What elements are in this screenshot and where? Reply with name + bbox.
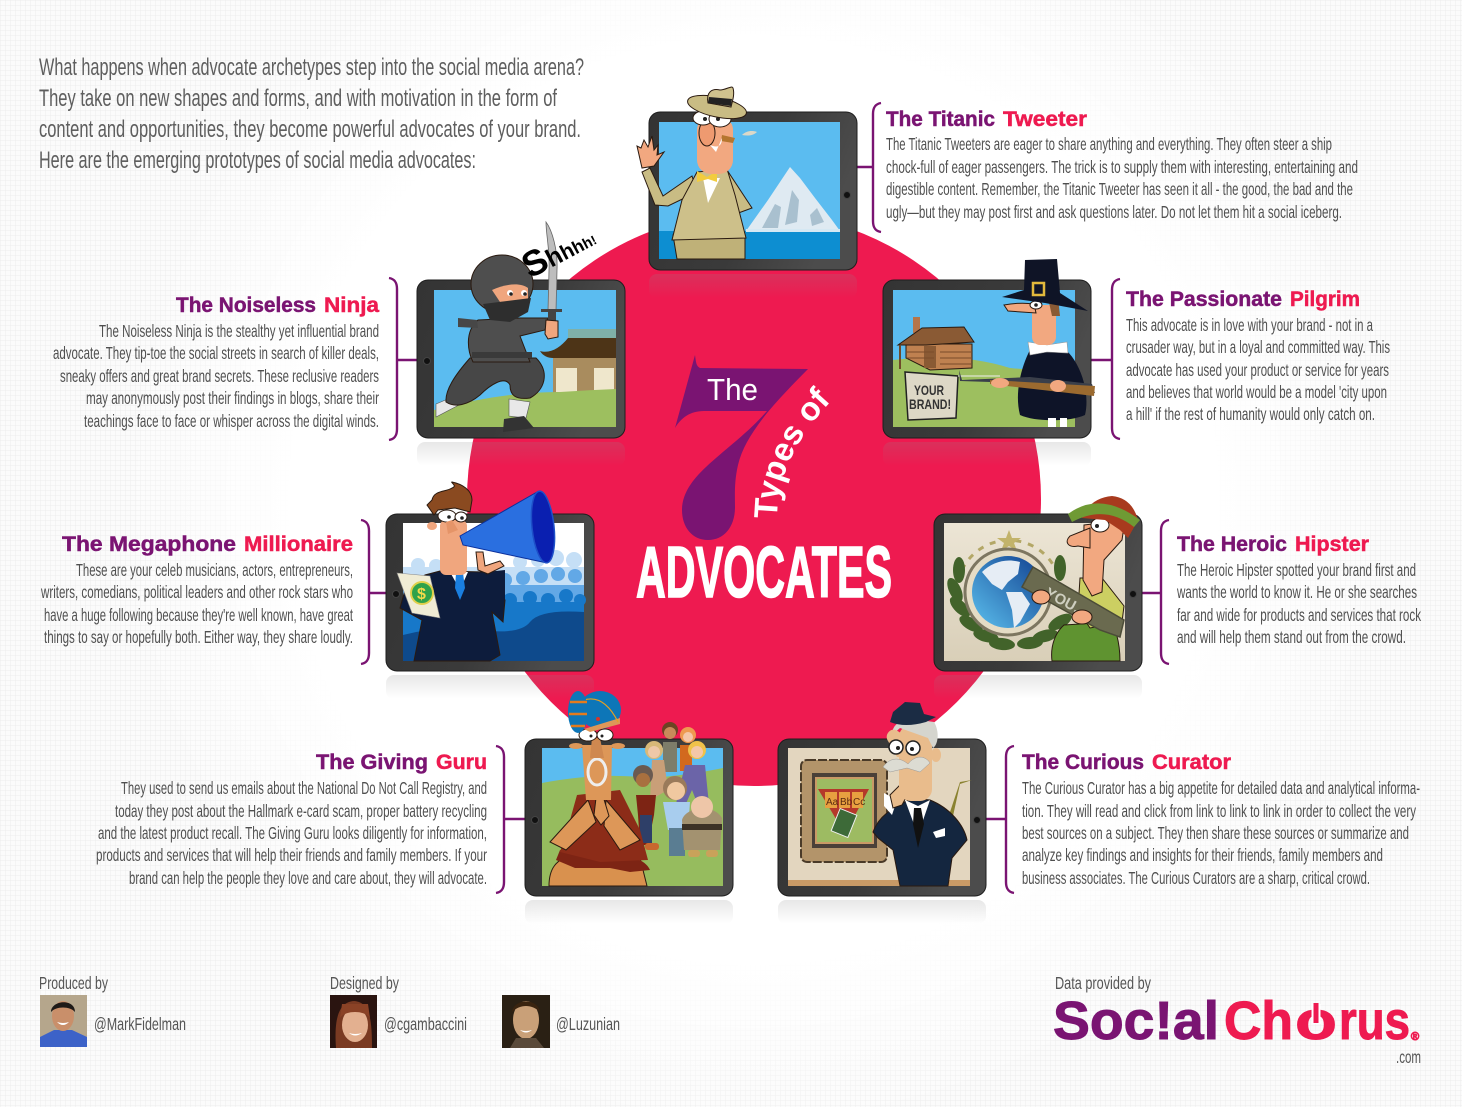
description: The Noiseless Ninja is the stealthy yet influential brand [99,321,379,341]
description: teachings face to face or whisper across the digital winds. [84,411,379,431]
tablet [417,280,625,438]
description [40,560,353,647]
intro text: What happens when advocate archetypes step into the social media arena? [39,54,584,81]
tablet screen: log cabin scene: YOUR [914,382,944,398]
photo: C Gambaccini [330,995,377,1048]
character: curator with glasses [873,702,972,886]
character: hipster with plaque: YOU... [1042,585,1090,621]
purple number seven [675,355,808,540]
logo: SocialChorus: o [1295,991,1337,1051]
tablet reflection [883,442,1091,466]
character: millionaire with megaphone: $ [417,586,426,603]
credit: produced by: @MarkFidelman [94,1014,186,1034]
tablet reflection [778,900,986,924]
heading: Pilgrim [1290,287,1360,311]
panel: Giving Guru [96,691,733,924]
heading: Tweeter [1003,107,1088,131]
character: ninja with sword [436,214,601,432]
logo: SocialChorus: rus [1339,991,1410,1051]
tablet screen: temple scene [424,290,616,427]
panel: Titanic Tweeter [637,87,1358,298]
credit: data provided by SocialChorus [1053,973,1421,1067]
panel: Passionate Pilgrim [883,259,1390,466]
description [1126,315,1390,424]
tablet [525,739,733,896]
character: hipster with plaque [1022,496,1140,661]
logo: SocialChorus: Ch [1224,991,1293,1051]
description: products and services that will help their friends and family members. If your [96,845,487,865]
sound effect text: Shhhh! [515,214,601,286]
panel: Heroic Hipster [934,496,1421,699]
heading [1177,532,1370,556]
description [96,778,487,888]
logo: SocialChorus: ® [1411,1031,1419,1043]
tablet reflection [649,274,857,298]
description: have a huge following because they're well known, have great [44,605,353,625]
tablet [934,514,1142,671]
connector bracket [361,520,386,664]
description: sneaky offers and great brand secrets. These reclusive readers [60,366,379,386]
panel: Curious Curator [778,702,1420,924]
description: writers, comedians, political leaders and other rock stars who [40,582,353,602]
tablet screen: crowd scene [392,523,586,661]
words Types of on a curve: Types of [754,385,829,518]
description: advocate. They tip-toe the social streets in search of killer deals, [53,343,379,363]
tablet reflection [525,900,733,924]
connector bracket [986,746,1014,893]
character: pilgrim with musket [959,259,1095,427]
tablet [386,514,594,671]
red central circle [467,212,1041,786]
heading: The Titanic [886,107,995,131]
heading [1022,750,1232,774]
photo: Mark Fidelman [40,995,87,1047]
heading: The Curious [1022,750,1144,774]
heading: Ninja [324,293,380,317]
connector bracket [496,746,525,893]
heading [62,532,353,556]
connector bracket [857,103,881,232]
credit: produced by [39,973,186,1047]
description: These are your celeb musicians, actors, entrepreneurs, [76,560,353,580]
tablet screen: framed picture [788,748,980,886]
intro text [39,54,584,174]
heading: The Noiseless [176,293,316,317]
intro text: content and opportunities, they become powerful advocates of your brand. [39,116,581,143]
credit: designed by: @Luzunian [556,1014,620,1034]
credit: data provided by SocialChorus: Data provided by [1055,973,1151,993]
description [886,134,1358,222]
connector bracket [389,278,417,440]
heading: The Megaphone [62,532,236,556]
heading: The Giving [316,750,428,774]
tablet screen: framed picture: Cc [853,797,865,808]
intro text: They take on new shapes and forms, and with motivation in the form of [39,85,557,112]
description [1176,560,1421,647]
word Advocates: ADVOCATES [636,533,892,613]
word The: The [707,372,758,407]
character: tweeter in tan suit [637,87,752,259]
description: today they post about the Hallmark e-card scam, proper battery recycling [115,801,487,821]
central title: The 7 Types of Advocates [636,355,892,613]
tablet [649,112,857,270]
description: They used to send us emails about the National Do Not Call Registry, and [121,778,487,798]
panel: Noiseless Ninja [53,214,625,466]
credit: produced by: Produced by [39,973,108,993]
intro text: Here are the emerging prototypes of social media advocates: [39,147,476,174]
tablet reflection [417,442,625,466]
credit: designed by: @cgambaccini [384,1014,467,1034]
tablet screen: framed picture: Aa [826,797,839,808]
heading [1126,287,1360,311]
group of people [633,722,722,857]
logo: SocialChorus: Soc!al [1053,991,1219,1051]
tablet screen: globe emblem [944,523,1136,661]
logo: SocialChorus: .com [1396,1047,1421,1067]
tablet screen: iceberg scene [659,122,850,259]
heading: Curator [1152,750,1232,774]
description [1022,778,1420,888]
description: things to say or hopefully both. Either way, they share loudly. [44,627,353,647]
connector bracket [1091,279,1120,439]
description: may anonymously post their findings in blogs, share their [86,388,379,408]
photo: Luzunian [502,995,550,1048]
heading [886,107,1088,131]
description: and the latest product recall. The Giving Guru looks diligently for information, [98,823,487,843]
tablet screen: log cabin scene [893,290,1075,427]
logo: SocialChorus [1053,991,1421,1067]
heading: Guru [436,750,487,774]
tablet screen: meadow [532,748,723,886]
credit: designed by: Designed by [330,973,399,993]
credit: designed by [330,973,620,1048]
character: guru in turban [549,691,650,886]
heading: The Heroic [1177,532,1287,556]
description [53,321,379,431]
character: millionaire with megaphone [397,482,558,661]
tablet [883,280,1091,438]
connector bracket [1142,520,1169,664]
heading: Millionaire [244,532,353,556]
tablet reflection [934,675,1142,699]
tablet [778,739,986,896]
heading [316,750,487,774]
tablet screen: log cabin scene: BRAND! [909,396,951,412]
panel: Megaphone Millionaire [40,482,594,699]
heading: The Passionate [1126,287,1282,311]
description: brand can help the people they love and care about, they will advocate. [129,868,487,888]
tablet reflection [386,675,594,699]
tablet screen: framed picture: Bb [840,797,853,808]
heading: Hipster [1295,532,1370,556]
